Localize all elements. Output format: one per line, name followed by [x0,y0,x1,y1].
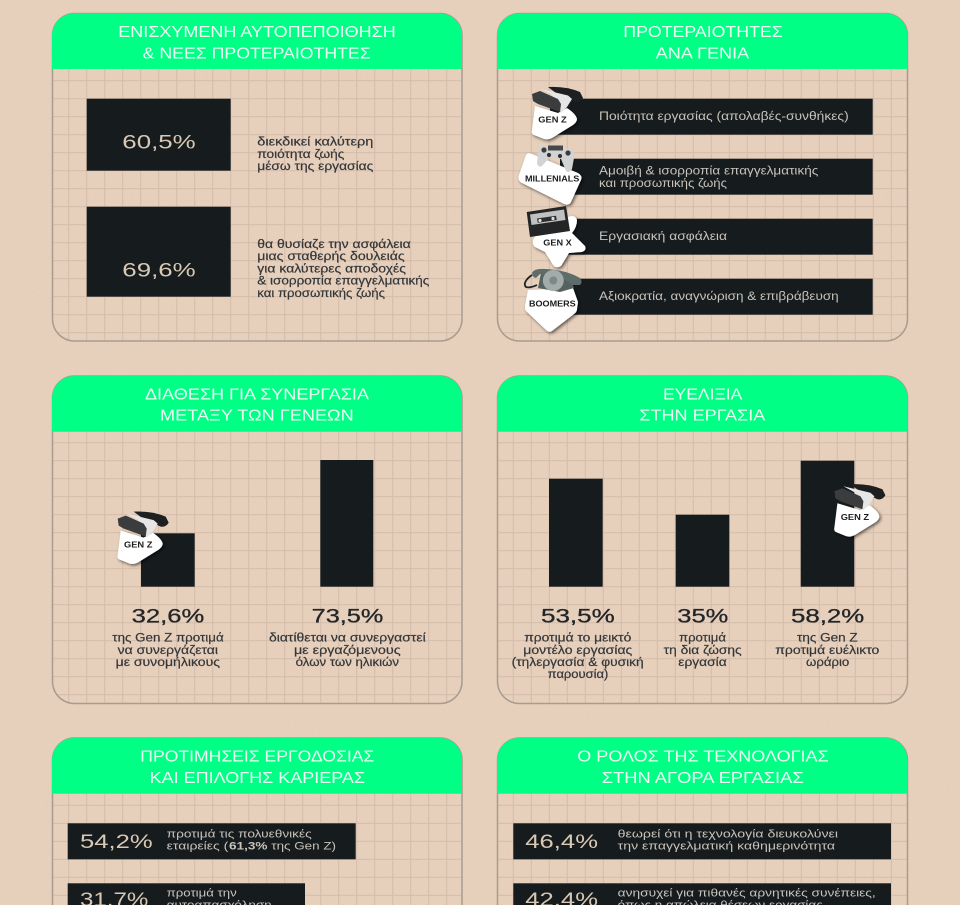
stat: 73,5%: όλων των ηλικιών [296,657,399,669]
badge: Gen Z: GEN Z [538,116,567,125]
stat box 60,5%: 60,5% [122,132,196,154]
stat: 35%: προτιμά [679,633,726,645]
panel header [52,738,462,794]
bar: self-employment 31,7%: προτιμά την [167,888,237,900]
panel header [497,738,908,794]
badge: Gen Z [532,87,583,139]
panel body [52,14,462,341]
stat: 32,6%: να συνεργάζεται [118,645,219,657]
bar: multinationals 54,2% [68,823,356,859]
bar: technology helps 46,4% [513,823,891,859]
badge: Millennials [518,146,582,205]
panel body [498,376,908,704]
stat: 35% [664,605,742,669]
stat box 69,6%: 69,6% [122,260,196,282]
panel: priorities by generation [497,14,908,341]
text: would sacrifice job security: θα θυσίαζε την ασφάλεια [257,239,411,251]
bar: multinationals 54,2%: εταιρείες ( [167,840,229,852]
heading: ΣΤΗΝ ΑΓΟΡΑ ΕΡΓΑΣΙΑΣ [602,770,804,787]
panel body [498,14,908,341]
text: would sacrifice job security: για καλύτερες αποδοχές [257,263,407,275]
stat: 58,2%: ωράριο [806,657,849,669]
row: Gen Z priority: Ποιότητα εργασίας (απολαβές-συνθήκες) [599,111,849,123]
stat: 53,5%: 53,5% [541,605,615,627]
panel: role of technology in the labour market [497,738,908,905]
bar: technology concerns 42,4%: ανησυχεί για πιθανές αρνητικές συνέπειες, [618,888,876,900]
row: Millennials priority: Αμοιβή & ισορροπία επαγγελματικής [599,166,819,178]
badge: Gen Z [834,484,885,537]
badge: Gen X [527,206,586,267]
heading: Ο ΡΟΛΟΣ ΤΗΣ ΤΕΧΝΟΛΟΓΙΑΣ [577,749,829,766]
text: better quality of life: ποιότητα ζωής [257,149,345,161]
panel: employer and career preferences [52,738,462,905]
heading [623,24,783,62]
panel: flexibility at work [497,376,908,704]
badge: Gen Z [117,511,169,564]
panel header [52,376,462,432]
heading [145,386,370,424]
bar: multinationals 54,2%: της Gen Z) [271,840,336,852]
heading [577,749,829,787]
stat: 58,2% [775,605,879,669]
row: Gen Z priority [550,99,873,135]
panel: confidence and new priorities [52,14,462,341]
badge: Millennials: MILLENIALS [525,174,580,184]
text: would sacrifice job security: & ισορροπία επαγγελματικής [257,276,430,288]
panel: willingness to collaborate across generations [52,376,462,704]
heading: ΣΤΗΝ ΕΡΓΑΣΙΑ [639,408,766,424]
text: better quality of life: μέσω της εργασίας [257,161,374,173]
stat: 32,6% [112,605,224,669]
badge: Boomers [525,269,582,332]
heading: ΕΝΙΣΧΥΜΕΝΗ ΑΥΤΟΠΕΠΟΙΘΗΣΗ [118,24,396,41]
panel body [52,738,462,905]
panel body [498,738,908,905]
bar: multinationals 54,2%: 54,2% [80,831,153,853]
stat: 53,5%: μοντέλο εργασίας [523,645,633,657]
row: Millennials priority: και προσωπικής ζωής [599,178,728,190]
stat box 60,5% [87,99,231,171]
heading: ΠΡΟΤΙΜΗΣΕΙΣ ΕΡΓΟΔΟΣΙΑΣ [140,749,374,766]
heading: ΜΕΤΑΞΥ ΤΩΝ ΓΕΝΕΩΝ [160,408,354,424]
text: would sacrifice job security: και προσωπικής ζωής [257,288,386,300]
stat: 53,5%: προτιμά το μεικτό [524,633,631,645]
panel header [52,14,462,69]
stat: 73,5%: με εργαζόμενους [294,645,401,657]
bar: technology helps 46,4%: 46,4% [525,831,598,853]
bar: technology concerns 42,4% [513,883,891,905]
heading: ΚΑΙ ΕΠΙΛΟΓΗΣ ΚΑΡΙΕΡΑΣ [150,770,365,787]
heading: ΕΥΕΛΙΞΙΑ [663,386,743,403]
stat: 53,5% [512,605,644,681]
panel body [52,376,462,704]
badge: Boomers: BOOMERS [529,300,576,309]
heading: ΑΝΑ ΓΕΝΙΑ [656,45,750,62]
stat: 73,5%: 73,5% [312,605,383,627]
bar: technology helps 46,4%: θεωρεί ότι η τεχνολογία διευκολύνει [618,829,839,841]
heading: ΔΙΑΘΕΣΗ ΓΙΑ ΣΥΝΕΡΓΑΣΙΑ [145,386,370,403]
stat: 58,2%: προτιμά ευέλικτο [775,645,879,657]
stat: 32,6%: με συνομήλικους [116,657,221,669]
bar: multinationals 54,2%: προτιμά τις πολυεθνικές [167,829,312,841]
row: Boomers priority: Αξιοκρατία, αναγνώριση & επιβράβευση [599,291,839,303]
heading: & ΝΕΕΣ ΠΡΟΤΕΡΑΙΟΤΗΤΕΣ [143,45,371,62]
row: Gen X priority: Εργασιακή ασφάλεια [599,231,727,243]
stat: 53,5%: παρουσία) [548,669,608,681]
bar: multinationals 54,2%: 61,3% [229,840,268,852]
stat: 73,5%: διατίθεται να συνεργαστεί [269,633,426,645]
text: would sacrifice job security [257,239,430,300]
badge: Gen Z: GEN Z [124,540,152,549]
stat: 35%: 35% [677,605,728,627]
heading [118,24,396,62]
row: Millennials priority [560,159,873,195]
text: better quality of life [257,137,374,173]
row: Gen X priority [560,219,873,255]
stat: 35%: εργασία [678,657,727,669]
stat: 73,5% [269,605,426,669]
heading [140,749,374,787]
stat: 32,6%: της Gen Z προτιμά [112,633,224,645]
heading [639,386,766,424]
stat: 35%: τη δια ζώσης [664,645,742,657]
stat: 58,2%: 58,2% [791,605,864,627]
bar: self-employment 31,7% [68,883,305,905]
panel header [497,376,908,432]
stat: 58,2%: της Gen Z [797,633,858,645]
stat: 53,5%: (τηλεργασία & φυσική [512,657,644,669]
row: Boomers priority [560,279,873,315]
badge: Gen Z: GEN Z [841,513,869,522]
bar chart: flexibility [549,461,854,587]
stat box 69,6% [87,207,231,297]
heading: ΠΡΟΤΕΡΑΙΟΤΗΤΕΣ [623,24,783,41]
badge: Gen X: GEN X [543,239,572,248]
text: would sacrifice job security: μιας σταθερής δουλειάς [257,251,405,263]
text: better quality of life: διεκδικεί καλύτερη [257,137,373,149]
bar: technology helps 46,4%: την επαγγελματική καθημερινότητα [618,840,836,852]
panel header [497,14,908,69]
stat: 32,6%: 32,6% [132,605,204,627]
bar chart: collaboration [141,460,373,587]
